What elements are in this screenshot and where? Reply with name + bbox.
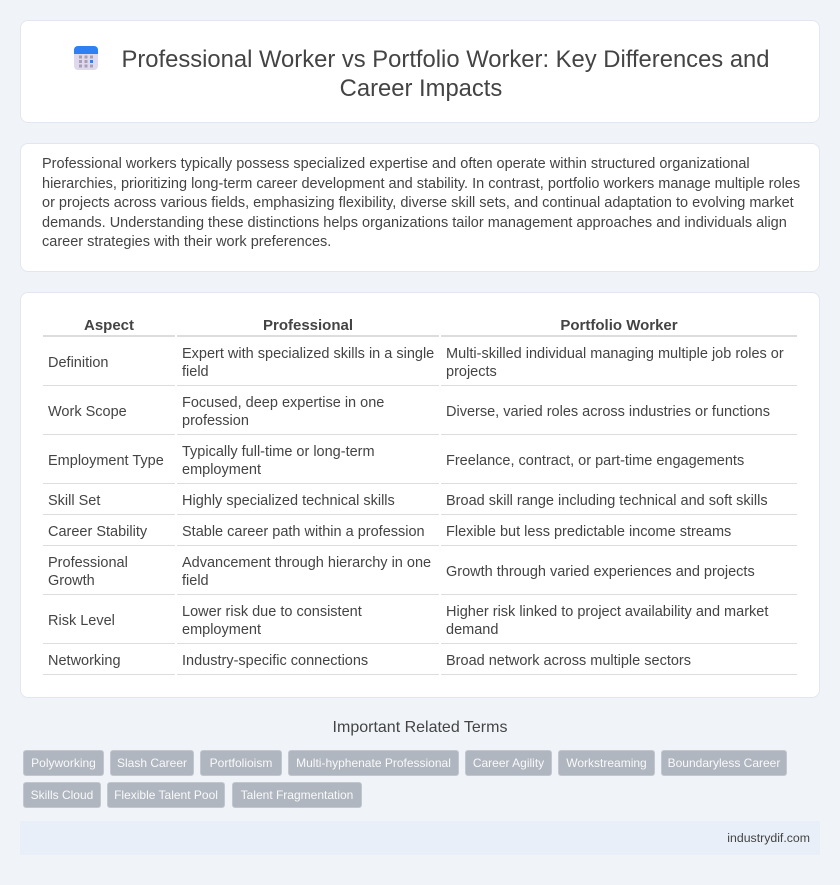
comparison table: Higher risk linked to project availability and market: [446, 604, 768, 620]
tags: related terms: Skills Cloud: [31, 788, 93, 802]
heading: related terms: Important Related Terms: [333, 719, 507, 736]
comparison table: Typically full-time or long-term: [182, 444, 375, 460]
comparison table: employment: [182, 462, 261, 478]
comparison table: field: [182, 573, 209, 589]
text block: introduction: hierarchies, prioritizing long-term career development and stability. In contrast, portfolio workers manage multiple roles: [42, 176, 800, 192]
comparison table: Growth through varied experiences and projects: [446, 564, 755, 580]
comparison table: Diverse, varied roles across industries or functions: [446, 404, 770, 420]
comparison table: demand: [446, 622, 498, 638]
comparison table: Flexible but less predictable income streams: [446, 524, 731, 540]
comparison table: Lower risk due to consistent: [182, 604, 362, 620]
comparison table: Employment Type: [48, 453, 164, 469]
comparison table: [43, 317, 797, 675]
tags: related terms: [23, 750, 787, 808]
tags: related terms: Multi-hyphenate Professional: [296, 756, 451, 770]
tags: related terms: Talent Fragmentation: [241, 788, 353, 802]
text block: introduction: Professional workers typically possess specialized expertise and often operate within structured organizational: [42, 156, 750, 172]
tags: related terms: Polyworking: [31, 756, 96, 770]
comparison table: Aspect: [84, 317, 134, 334]
tags: related terms: Flexible Talent Pool: [114, 788, 218, 802]
comparison table: Focused, deep expertise in one: [182, 395, 384, 411]
text block: introduction: demands. Understanding these distinctions helps organizations tailor management approaches and individuals align: [42, 214, 787, 230]
comparison table: Professional: [48, 555, 128, 571]
comparison table: employment: [182, 622, 261, 638]
tags: related terms: Workstreaming: [566, 756, 647, 770]
text block: introduction: [42, 156, 800, 250]
text block: introduction: or projects across various fields, emphasizing flexibility, diverse skill sets, and continual adaptation to evolving market: [42, 195, 794, 211]
comparison table: Multi-skilled individual managing multiple job roles or: [446, 346, 784, 362]
text block: introduction: career strategies with their work preferences.: [42, 234, 331, 250]
comparison table: Career Stability: [48, 524, 147, 540]
comparison table: Skill Set: [48, 493, 100, 509]
title: [121, 46, 770, 102]
comparison table: Growth: [48, 573, 95, 589]
panel: introduction: [20, 143, 820, 272]
comparison table: projects: [446, 364, 497, 380]
comparison table: Expert with specialized skills in a single: [182, 346, 434, 362]
comparison table: Risk Level: [48, 613, 115, 629]
comparison table: Broad network across multiple sectors: [446, 653, 691, 669]
comparison table: Highly specialized technical skills: [182, 493, 395, 509]
tags: related terms: Career Agility: [473, 756, 544, 770]
comparison table: Stable career path within a profession: [182, 524, 425, 540]
title: Career Impacts: [340, 75, 502, 102]
comparison table: Industry-specific connections: [182, 653, 368, 669]
comparison table: profession: [182, 413, 249, 429]
comparison table: field: [182, 364, 209, 380]
title: Professional Worker vs Portfolio Worker: Key Differences and: [121, 46, 770, 73]
comparison table: Portfolio Worker: [560, 317, 678, 334]
tags: related terms: Portfolioism: [210, 756, 272, 770]
comparison table: Broad skill range including technical and soft skills: [446, 493, 768, 509]
panel: header: [20, 20, 820, 123]
tags: related terms: Boundaryless Career: [668, 756, 780, 770]
comparison table: Freelance, contract, or part-time engagements: [446, 453, 744, 469]
tags: related terms: Slash Career: [117, 756, 187, 770]
comparison table: Networking: [48, 653, 121, 669]
footer: [20, 821, 820, 855]
comparison table: Advancement through hierarchy in one: [182, 555, 431, 571]
comparison table: Definition: [48, 355, 108, 371]
icon: calendar: [74, 46, 98, 70]
panel: comparison table: [20, 292, 820, 698]
footer: industrydif.com: [727, 831, 810, 845]
comparison table: Professional: [263, 317, 353, 334]
comparison table: Work Scope: [48, 404, 127, 420]
